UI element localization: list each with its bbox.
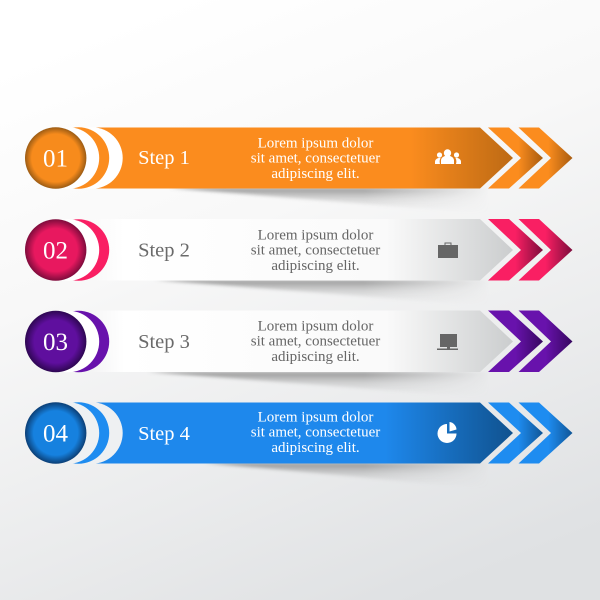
heading: step 2: Step 2	[138, 240, 190, 262]
chevrons: step 3	[488, 310, 572, 372]
panel: step 1	[25, 127, 572, 214]
crescents: step 3	[38, 311, 109, 372]
text block: step 2: adipiscing elit.	[271, 258, 360, 274]
text block: step 1: adipiscing elit.	[271, 166, 360, 182]
chevrons: step 4	[488, 402, 572, 464]
icon: pie chart	[438, 422, 456, 443]
panel: step 3	[25, 310, 572, 398]
text block: step 4: adipiscing elit.	[271, 440, 360, 456]
chevrons: step 2	[488, 219, 572, 280]
chevrons: step 1	[488, 128, 572, 188]
heading: step 4: Step 4	[138, 423, 190, 445]
banner: step 4	[92, 402, 513, 464]
icon: briefcase	[438, 242, 458, 258]
banner: step 1	[92, 128, 513, 188]
number badge: 03	[25, 311, 86, 372]
text block: step 1: Lorem ipsum dolor	[258, 136, 373, 152]
text block: step 2: sit amet, consectetuer	[251, 242, 380, 258]
text block: step 4: Lorem ipsum dolor	[258, 410, 373, 426]
number badge: 02	[25, 219, 86, 281]
crescents: step 2	[38, 219, 109, 281]
number badge: 03: 03	[43, 329, 68, 356]
text block: step 1: sit amet, consectetuer	[251, 150, 380, 166]
text block: step 2: Lorem ipsum dolor	[258, 228, 373, 244]
text block: step 3: adipiscing elit.	[271, 349, 360, 365]
panel: step 2	[25, 219, 572, 306]
crescents: step 1	[38, 127, 123, 189]
text block: step 3: Lorem ipsum dolor	[258, 318, 373, 334]
shadow: step 2	[160, 280, 477, 298]
text block: step 3: sit amet, consectetuer	[251, 334, 380, 350]
icon: monitor	[437, 334, 458, 350]
shadow: step 4	[210, 464, 475, 480]
crescents: step 4	[38, 402, 123, 464]
number badge: 04: 04	[43, 420, 68, 448]
number badge: 01	[25, 127, 86, 189]
number badge: 02: 02	[43, 238, 68, 264]
shadow: step 3	[153, 372, 475, 390]
panel: step 4	[25, 402, 572, 480]
banner: step 3	[90, 310, 513, 372]
number badge: 04	[25, 402, 86, 464]
heading: step 1: Step 1	[138, 147, 190, 169]
number badge: 01: 01	[43, 146, 68, 172]
text block: step 4: sit amet, consectetuer	[251, 424, 380, 440]
banner: step 2	[90, 219, 513, 280]
icon: people	[435, 149, 461, 164]
shadow: step 1	[174, 188, 477, 206]
heading: step 3: Step 3	[138, 331, 190, 353]
